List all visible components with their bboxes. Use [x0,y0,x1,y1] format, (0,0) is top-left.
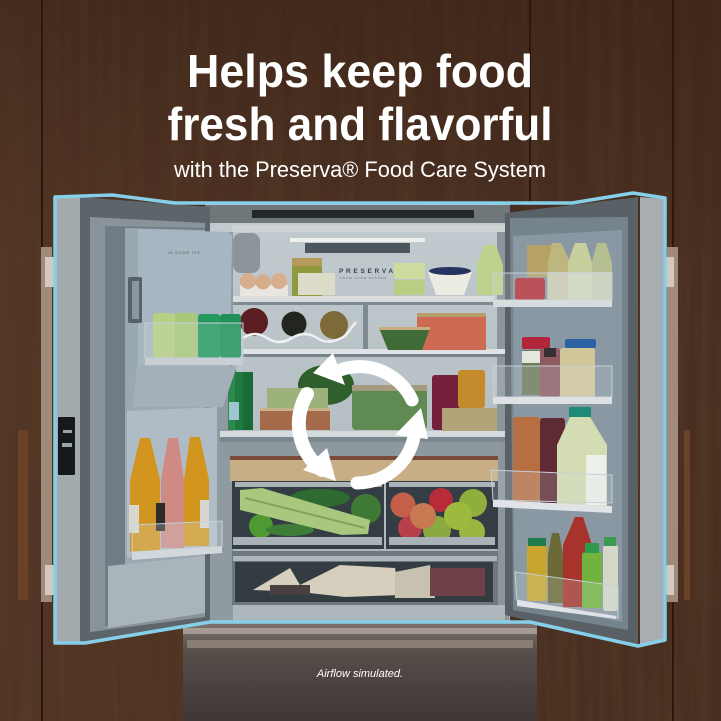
ice bin door: IN DOOR ICE [168,251,201,255]
fridge interior [205,204,510,622]
door display panel [58,417,75,475]
wine shelf [240,302,505,357]
juice bottles [129,437,222,560]
ice bin door [128,229,232,368]
airflow arrows [299,353,428,483]
cans in door bin [145,313,243,365]
arrow: right [357,408,428,483]
upper shelf with eggs and jars: PRESERVA [339,268,396,275]
subtitle: with the Preserva® Food Care System [173,157,546,182]
right door handle [665,247,678,602]
left door [55,197,243,643]
title [168,45,552,150]
bottom deli drawer [232,551,505,622]
lower freezer drawer [183,622,537,721]
dispenser funnel [133,366,237,407]
blue cooling outline [55,193,665,646]
right door [491,197,664,646]
footnote: Airflow simulated. [316,668,403,680]
right crisper drawer with apples [386,481,498,549]
crisper top wood tray [220,442,500,481]
middle door bin [493,337,612,404]
bottom door bin with condiments [515,517,618,619]
left crisper drawer with vegetables [232,481,384,549]
top door bin [493,243,612,307]
left door handle [41,247,54,602]
title: fresh and flavorful [168,98,552,150]
arrow: top [313,353,412,400]
upper shelf with eggs and jars [233,245,503,305]
arrow: left [299,394,336,481]
lower door liner [108,556,205,628]
dispenser recess [127,407,217,558]
upper shelf with eggs and jars: FOOD CARE SYSTEM [340,276,387,280]
title: Helps keep food [187,45,533,97]
main shelf with containers [220,365,508,442]
lower door bin with jug [491,407,612,513]
